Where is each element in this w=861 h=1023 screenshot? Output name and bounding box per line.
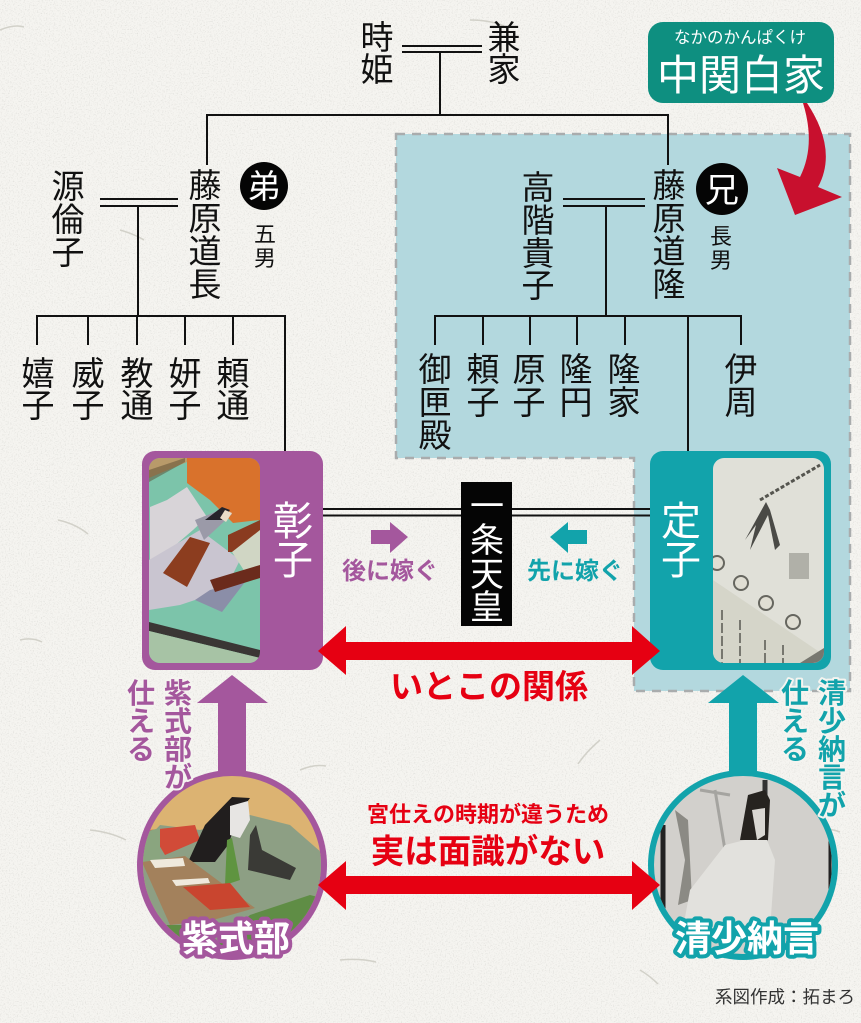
caption: serves (Sei) (781, 678, 846, 821)
Emperor Ichijo: 天 (470, 556, 504, 594)
children of Michitaka: 原 (512, 351, 546, 388)
name: Minamoto no Rinshi: 源 (52, 168, 84, 205)
name: Teishi: 定 (661, 500, 701, 544)
panel: Teishi (650, 451, 831, 670)
arrow: purple up (197, 675, 268, 780)
label: fifth son: 男 (254, 246, 276, 271)
name: Fujiwara no Michinaga: 道 (188, 233, 222, 270)
caption: serves (Sei): 言 (818, 762, 846, 793)
badge: younger brother: 弟 (248, 168, 280, 205)
children of Michinaga: 通 (216, 387, 250, 424)
caption: serves (Sei): 納 (818, 734, 846, 765)
children of Michitaka: 匣 (418, 384, 452, 421)
panel: Shoshi (142, 451, 323, 670)
caption: serves (Murasaki): 部 (164, 734, 192, 765)
children of Michitaka: 隆 (560, 351, 592, 388)
family name badge: なかのかんぱくけ (674, 28, 806, 47)
arrow: cousin relationship (318, 626, 660, 675)
portrait: Sei Shonagon (648, 770, 838, 960)
name: Shoshi: 彰 (273, 500, 313, 544)
caption: married first: 先に嫁ぐ (527, 558, 623, 585)
panel: Nakanokanpaku family area (396, 134, 850, 691)
name: Tokihime: 時 (360, 19, 394, 56)
arrow: purple right (371, 522, 408, 553)
children of Michinaga: 教 (120, 355, 154, 392)
children of Michinaga: 子 (22, 387, 54, 424)
caption: serves (Murasaki): が (164, 761, 192, 793)
children of Michinaga: 妍 (168, 355, 202, 392)
name: Fujiwara no Michitaka: 隆 (652, 266, 686, 303)
name: Takashina no Kishi: 階 (522, 202, 554, 239)
children of Michinaga: 子 (168, 387, 202, 424)
children of Michitaka: 子 (466, 384, 500, 421)
name: Kaneie: 兼 (488, 19, 520, 56)
caption: serves (Sei): 仕 (781, 678, 809, 709)
children of Michitaka: 伊 (724, 351, 758, 388)
name: Minamoto no Rinshi: 倫 (52, 201, 84, 238)
caption: actually never met: 実は面識がない (371, 833, 605, 871)
credit: 系図作成：拓まろ (715, 987, 855, 1007)
name: Minamoto no Rinshi: 子 (52, 234, 84, 271)
painting: Shoshi (149, 458, 260, 663)
name: Fujiwara no Michinaga: 長 (188, 266, 222, 303)
name: Fujiwara no Michitaka: 道 (652, 233, 686, 270)
children of Michitaka: 御 (418, 351, 452, 388)
children of Michitaka: 頼 (466, 351, 500, 388)
caption: serves (Murasaki): る (127, 734, 155, 765)
name: Teishi: 子 (661, 539, 701, 583)
name: Tokihime: 姫 (360, 51, 394, 88)
name label: Sei Shonagon: 清少納言 (675, 918, 819, 959)
name label: Murasaki Shikibu: 紫式部 (182, 918, 290, 959)
name: Kaneie: 家 (488, 51, 520, 88)
family tree lines (37, 46, 741, 516)
children of Michinaga: 嬉 (22, 355, 54, 392)
children of Michitaka (418, 351, 758, 454)
caption: serves (Murasaki): 仕 (127, 678, 155, 709)
label: eldest son: 男 (710, 248, 732, 273)
name: Fujiwara no Michitaka: 藤 (652, 167, 686, 204)
arrow: teal up (708, 675, 779, 780)
children of Michitaka: 殿 (418, 417, 452, 454)
arrow: curved red pointer (777, 103, 842, 215)
caption: serves (Sei): え (781, 706, 809, 737)
caption: serves (Murasaki) (127, 678, 192, 793)
name: Takashina no Kishi: 貴 (522, 235, 554, 272)
children of Michinaga: 威 (72, 355, 104, 392)
arrow: never met (318, 861, 660, 910)
children of Michitaka: 円 (560, 384, 592, 421)
caption: married later: 後に嫁ぐ (342, 558, 438, 585)
arrow: teal left (550, 522, 587, 553)
badge: elder brother (696, 163, 748, 215)
caption: cousins: いとこの関係 (390, 668, 588, 705)
name: Fujiwara no Michitaka: 原 (652, 200, 686, 237)
children of Michinaga: 通 (120, 387, 154, 424)
name: Shoshi: 子 (273, 539, 313, 583)
caption: serves (Murasaki): 式 (164, 706, 192, 737)
badge: younger brother (240, 162, 288, 210)
caption: serves (Sei): 清 (818, 678, 846, 709)
caption: serves (Sei): が (818, 789, 846, 821)
children of Michitaka: 家 (608, 384, 640, 421)
label: fifth son: 五 (254, 222, 276, 247)
name: Fujiwara no Michinaga: 藤 (188, 167, 222, 204)
Emperor Ichijo: 皇 (470, 589, 504, 627)
portrait: Murasaki Shikibu (137, 770, 330, 960)
children of Michitaka: 子 (512, 384, 546, 421)
children of Michinaga: 子 (72, 387, 104, 424)
painting: Teishi (710, 458, 824, 663)
children of Michinaga (22, 355, 250, 424)
caption: serves (Sei): 少 (818, 706, 846, 737)
Emperor Ichijo: 条 (470, 522, 504, 560)
Emperor Ichijo: 一 (470, 488, 504, 526)
family name badge (648, 22, 834, 103)
caption: serves (Sei): る (781, 734, 809, 765)
caption: serves (Murasaki): 紫 (164, 678, 192, 709)
caption: different periods: 宮仕えの時期が違うため (367, 802, 609, 827)
Emperor Ichijo (461, 482, 512, 627)
badge: elder brother: 兄 (705, 172, 739, 210)
children of Michitaka: 周 (724, 384, 758, 421)
label: eldest son: 長 (710, 224, 732, 249)
children of Michitaka: 隆 (608, 351, 640, 388)
name: Takashina no Kishi: 子 (522, 267, 554, 304)
family name badge: 中関白家 (657, 52, 825, 99)
name: Takashina no Kishi: 高 (522, 169, 554, 206)
children of Michinaga: 頼 (216, 355, 250, 392)
caption: serves (Murasaki): え (127, 706, 155, 737)
name: Fujiwara no Michinaga: 原 (188, 200, 222, 237)
